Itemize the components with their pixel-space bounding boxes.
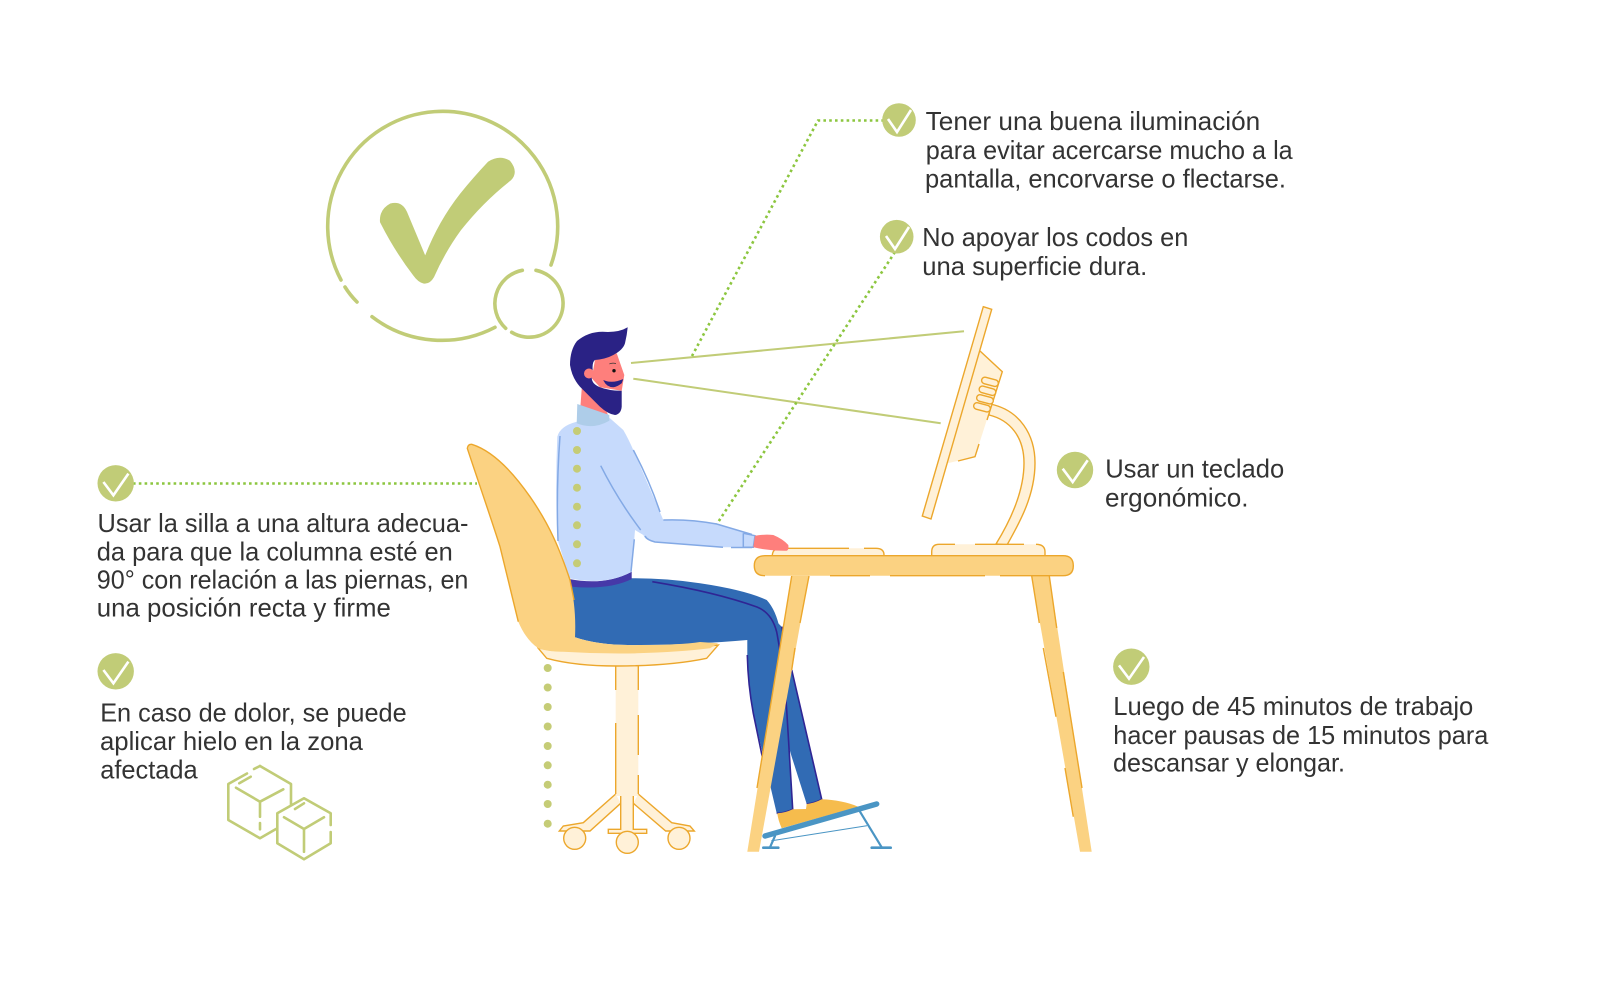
- check badge: [1113, 648, 1150, 685]
- tip text: lighting: [925, 106, 1293, 193]
- tip text: breaks: descansar y elongar.: [1113, 748, 1345, 778]
- near leg and thigh: [572, 578, 793, 813]
- seat underside: [538, 645, 718, 666]
- desk: [747, 556, 1092, 852]
- hair and beard: [570, 327, 628, 415]
- check badge: [882, 103, 916, 137]
- trouser seam lines: [652, 582, 822, 813]
- tip text: chair height: [97, 508, 469, 623]
- tip text: keyboard: [1105, 454, 1284, 513]
- tip text: keyboard: ergonómico.: [1105, 483, 1248, 513]
- icon: large check mark in dashed circle: [328, 111, 563, 340]
- left desk leg: [747, 576, 809, 852]
- tip: lighting: [882, 103, 1293, 193]
- sight lines from eyes to monitor: [631, 331, 964, 423]
- shoes: [777, 799, 858, 828]
- keyboard: [772, 548, 884, 556]
- shirt: [556, 418, 755, 581]
- tip: chair height: [97, 465, 469, 623]
- spine alignment dots on back: [573, 427, 581, 567]
- collar: [577, 404, 609, 426]
- tip text: lighting: Tener una buena iluminación: [926, 106, 1260, 136]
- check badge: [98, 653, 134, 690]
- dotted connector: chair tip to chair back: [133, 482, 477, 485]
- tip: keyboard: [1057, 452, 1284, 513]
- tip: ice for pain: [98, 653, 407, 784]
- neck: [580, 385, 610, 420]
- tip text: keyboard: Usar un teclado: [1105, 454, 1284, 484]
- dotted connector: elbows tip to forearm: [717, 252, 895, 524]
- tip text: breaks: hacer pausas de 15 minutos para: [1113, 720, 1489, 750]
- face: [592, 353, 624, 391]
- belt: [569, 572, 632, 587]
- check badge: [1057, 452, 1093, 488]
- far leg: [760, 605, 822, 804]
- right desk leg: [1032, 576, 1092, 852]
- chair column: [616, 660, 638, 796]
- tip: breaks: [1113, 648, 1489, 778]
- desk top: [754, 556, 1073, 576]
- chair back: [467, 444, 575, 651]
- tip text: breaks: [1113, 691, 1489, 778]
- eyebrow: [609, 362, 616, 365]
- tip text: chair height: 90° con relación a las piernas, en: [97, 565, 468, 595]
- hand: [753, 535, 788, 551]
- tip: elbows: [880, 220, 1188, 281]
- tip text: ice for pain: [100, 698, 407, 784]
- icon: ice cubes: [228, 766, 331, 859]
- tip text: elbows: No apoyar los codos en: [922, 222, 1188, 252]
- seat cushion: [538, 637, 718, 653]
- tip text: lighting: para evitar acercarse mucho a la: [926, 135, 1293, 165]
- tip text: chair height: una posición recta y firme: [97, 593, 391, 623]
- tip text: ice for pain: aplicar hielo en la zona: [100, 726, 364, 756]
- moustache and mouth: [603, 379, 623, 387]
- monitor on stand: [922, 307, 1045, 556]
- check badge: [880, 220, 914, 254]
- chair height dotted guide: [544, 664, 552, 828]
- person seated at desk: [556, 327, 822, 813]
- star base with wheels: [559, 794, 694, 853]
- eye: [612, 369, 616, 372]
- tip text: breaks: Luego de 45 minutos de trabajo: [1113, 691, 1473, 721]
- tip text: lighting: pantalla, encorvarse o flectarse.: [925, 163, 1286, 193]
- tip text: chair height: da para que la columna esté en: [97, 536, 453, 566]
- tip text: ice for pain: En caso de dolor, se puede: [100, 698, 407, 728]
- footrest: [763, 804, 891, 848]
- ear: [584, 368, 594, 378]
- check badge: [98, 465, 134, 501]
- shirt seam lines: [557, 436, 755, 572]
- tip text: ice for pain: afectada: [100, 754, 198, 784]
- office chair: [467, 444, 718, 853]
- tip text: elbows: [922, 222, 1188, 281]
- dotted connector: lighting tip to head: [692, 120, 884, 356]
- tip text: chair height: Usar la silla a una altura adecua-: [98, 508, 468, 538]
- tip text: elbows: una superficie dura.: [922, 251, 1147, 281]
